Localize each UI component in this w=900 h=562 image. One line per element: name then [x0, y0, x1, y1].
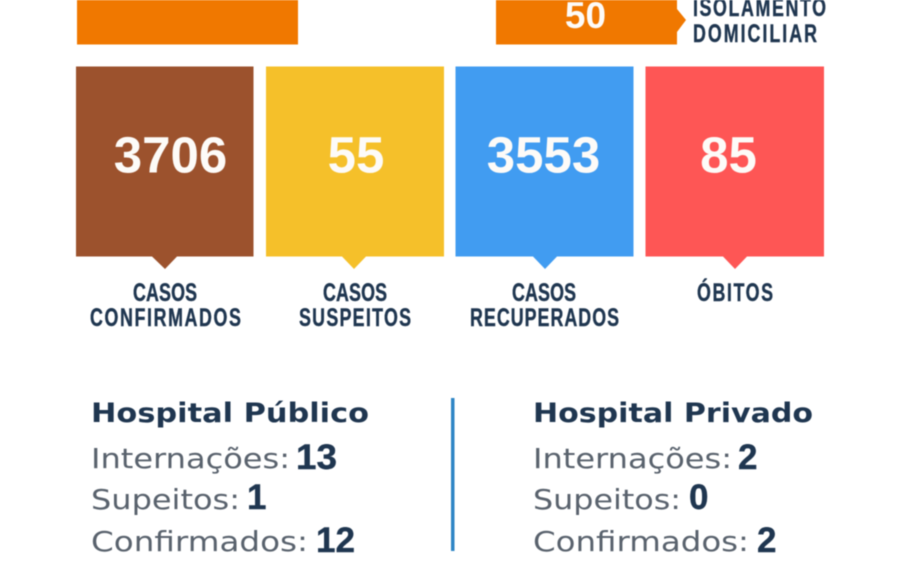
row: suspected: [533, 478, 708, 517]
label: recovered: CASOS: [512, 278, 576, 307]
row: admissions: 13: [296, 438, 337, 477]
number: confirmed: 3706: [114, 126, 227, 184]
row: admissions: [533, 438, 757, 477]
heading: public hospital: Hospital Público: [91, 398, 369, 429]
row: admissions: 2: [738, 438, 757, 477]
row: suspected: Supeitos:: [91, 483, 240, 516]
label: confirmed: CONFIRMADOS: [90, 303, 241, 332]
label: recovered: RECUPERADOS: [470, 303, 619, 332]
yellow card: [266, 66, 444, 269]
label: suspected: [299, 278, 411, 332]
label: deaths: ÓBITOS: [697, 278, 773, 307]
label: confirmed: [90, 278, 241, 332]
row: confirmed: [91, 521, 355, 560]
label: confirmed: CASOS: [133, 278, 197, 307]
panel: home isolation: [496, 0, 826, 48]
row: confirmed: [533, 521, 776, 560]
panel: confirmed cases: [76, 66, 254, 332]
row: confirmed: Confirmados:: [533, 525, 749, 558]
label: home isolation: [693, 0, 826, 48]
number: suspected: 55: [328, 126, 384, 184]
number: deaths: 85: [700, 126, 757, 184]
panel: recovered cases: [456, 66, 634, 332]
row: confirmed: 2: [757, 521, 776, 560]
panel: private hospital: [533, 398, 813, 560]
panel: public hospital: [91, 398, 369, 560]
panel: orange bar left: [77, 0, 298, 44]
row: admissions: Internações:: [533, 442, 732, 475]
row: confirmed: Confirmados:: [91, 525, 308, 558]
row: confirmed: 12: [316, 521, 355, 560]
row: suspected: Supeitos:: [533, 483, 681, 516]
label: suspected: CASOS: [323, 278, 387, 307]
row: suspected: 1: [247, 478, 266, 517]
label: suspected: SUSPEITOS: [299, 303, 411, 332]
row: admissions: [91, 438, 337, 477]
number: recovered: 3553: [487, 126, 600, 184]
red card: [646, 66, 824, 269]
blue card: [456, 66, 634, 269]
row: admissions: Internações:: [91, 442, 290, 475]
label: recovered: [470, 278, 619, 332]
label: home isolation: DOMICILIAR: [693, 19, 817, 48]
heading: private hospital: Hospital Privado: [533, 398, 813, 429]
panel: deaths: [646, 66, 824, 307]
row: suspected: 0: [689, 478, 708, 517]
brown card: [76, 66, 254, 269]
row: suspected: [91, 478, 266, 517]
orange arrow box: [496, 0, 686, 44]
panel: suspected cases: [266, 66, 444, 332]
